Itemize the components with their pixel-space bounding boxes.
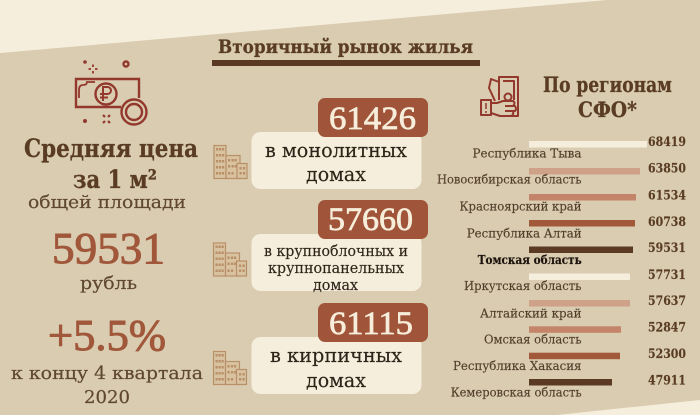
icon: banknote with ruble and coin: [76, 60, 146, 125]
row: Irkutsk: Иркутская область: [464, 278, 582, 293]
number: price: 59531: [52, 224, 165, 273]
card: block and panel label: крупнопанельных: [268, 259, 405, 277]
row: Khakassia: [453, 347, 686, 373]
heading: by region: По регионам: [543, 72, 672, 97]
row: Irkutsk: 57731: [648, 268, 686, 283]
icon: buildings: [214, 146, 247, 178]
card: monolithic label: в монолитных: [265, 139, 407, 162]
row: Krasnoyarsk: 61534: [648, 188, 686, 203]
row: Khakassia: 52300: [648, 347, 686, 362]
panel: large-block and large-panel houses: [214, 200, 428, 294]
badge: 57660: 57660: [328, 202, 413, 238]
title: Вторичный рынок жилья: [218, 36, 473, 58]
card: block and panel label: [252, 234, 422, 294]
row: Altai Krai: Алтайский край: [480, 305, 582, 320]
number: growth: +5.5%: [48, 311, 166, 360]
row: Kemerovo: [451, 374, 686, 399]
card: brick label: [252, 337, 422, 394]
card: monolithic label: [252, 132, 422, 189]
title: [212, 36, 480, 66]
card: brick label: домах: [306, 369, 366, 392]
badge: 61426: 61426: [329, 101, 416, 137]
row: Altai Republic: 60738: [648, 215, 686, 230]
row: Altai Republic: Республика Алтай: [467, 226, 582, 240]
heading: by region: СФО*: [578, 97, 637, 122]
heading: by region: [543, 72, 672, 122]
row: Altai Krai: [480, 294, 686, 320]
panel: brick houses: [214, 303, 428, 394]
badge: 61115: [318, 303, 428, 342]
row: Novosibirsk: Новосибирская область: [437, 172, 582, 187]
text: year: 2020: [84, 387, 130, 408]
bar chart: regions: [437, 135, 686, 399]
row: Altai Republic: [467, 215, 686, 240]
row: Tomsk (highlighted): 59531: [648, 241, 686, 256]
row: Irkutsk: [464, 268, 686, 293]
row: Khakassia: Республика Хакасия: [453, 358, 582, 373]
row: Kemerovo: Кемеровская область: [451, 384, 582, 399]
icon: buildings: [214, 243, 246, 276]
heading: per square metre: за 1 м²: [73, 165, 157, 194]
row: Omsk: [484, 321, 686, 347]
text: rouble: рубль: [80, 273, 137, 294]
row: Tuva: 68419: [648, 135, 686, 150]
heading: average price: Средняя цена: [24, 134, 198, 163]
badge: 61426: [318, 98, 428, 137]
card: monolithic label: домах: [306, 163, 366, 186]
row: Tomsk (highlighted): [478, 241, 686, 267]
row: Omsk: Омская область: [484, 332, 582, 347]
row: Tomsk (highlighted): Томская область: [478, 252, 582, 267]
icon: hand holding banknotes: [481, 77, 518, 116]
card: block and panel label: домах: [313, 276, 359, 294]
panel: monolithic houses: [214, 98, 428, 189]
row: Altai Krai: 57637: [648, 294, 686, 309]
badge: 57660: [318, 200, 428, 239]
row: Krasnoyarsk: Красноярский край: [460, 199, 582, 214]
row: Novosibirsk: [437, 162, 686, 187]
row: Tuva: Республика Тыва: [472, 146, 582, 160]
row: Krasnoyarsk: [460, 188, 686, 214]
icon: buildings: [214, 352, 246, 384]
row: Tuva: [472, 135, 686, 160]
row: Omsk: 52847: [648, 321, 686, 336]
badge: 61115: 61115: [329, 306, 413, 342]
row: Kemerovo: 47911: [648, 374, 686, 389]
panel: average price: [11, 60, 203, 408]
row: Novosibirsk: 63850: [648, 162, 686, 177]
card: brick label: в кирпичных: [270, 344, 402, 367]
text: by end of quarter: к концу 4 квартала: [11, 363, 203, 384]
text: total area: общей площади: [28, 192, 186, 213]
card: block and panel label: в крупноблочных и: [264, 242, 408, 260]
